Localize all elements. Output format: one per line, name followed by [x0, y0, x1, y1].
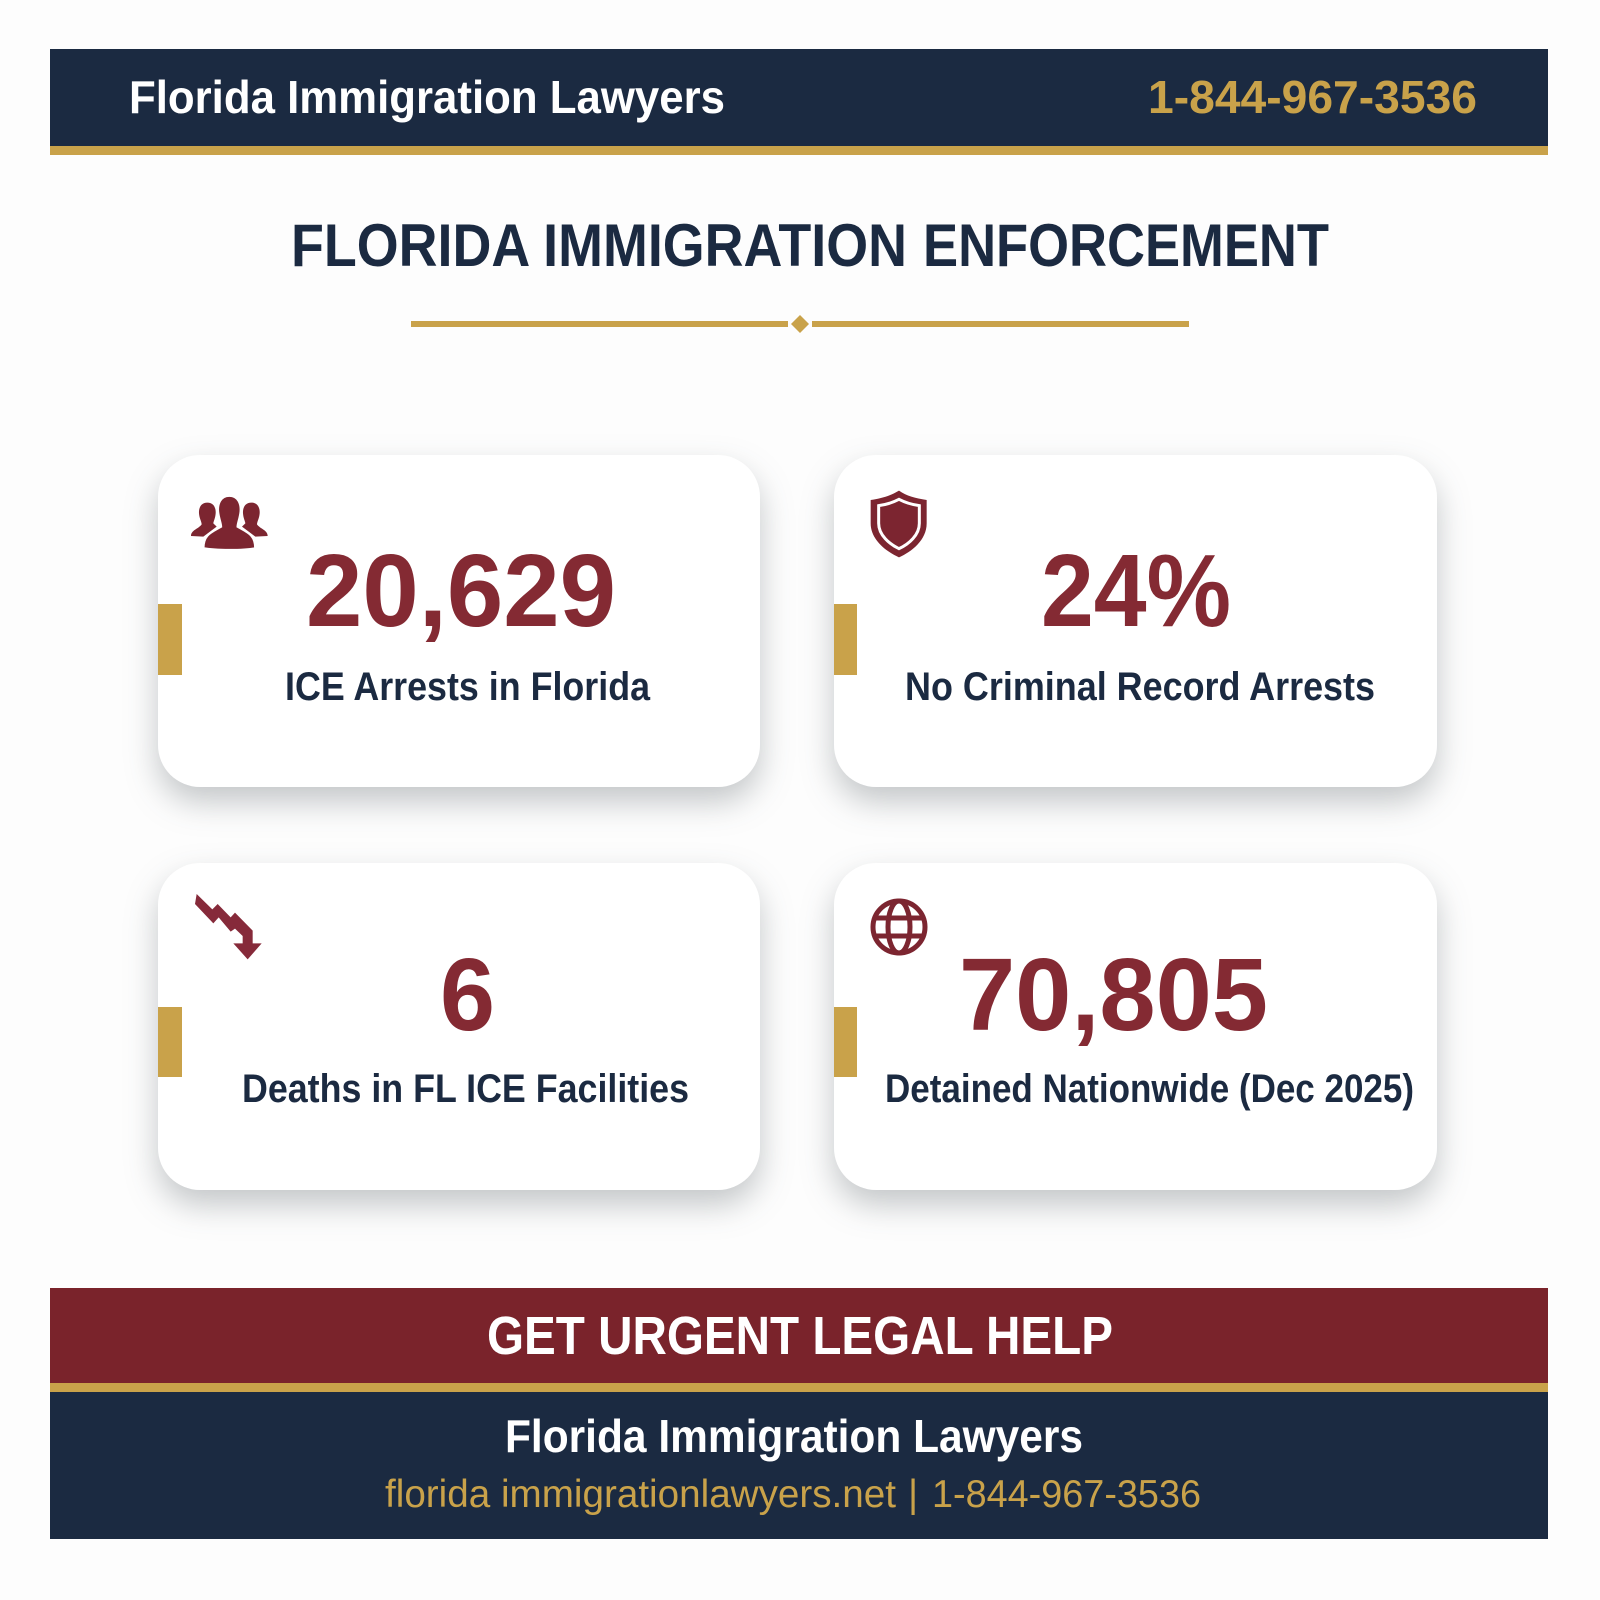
call to action text: GET URGENT LEGAL HELP: [487, 1306, 1113, 1366]
panel: detained nationwide: [834, 863, 1437, 1190]
icon: downward zigzag arrow: [195, 894, 262, 959]
header phone number: 1-844-967-3536: [1148, 71, 1477, 123]
stat: 24%: 24%: [1041, 533, 1231, 648]
title: [291, 212, 1329, 279]
footer contact line: |: [908, 1473, 918, 1516]
footer contact line: florida immigrationlawyers.net: [385, 1473, 896, 1516]
panel: ICE arrests in Florida: [158, 455, 760, 787]
panel: deaths in FL ICE facilities: [158, 863, 760, 1190]
title: ENFORCEMENT: [923, 212, 1329, 279]
footer contact line: [385, 1473, 1201, 1516]
stat: 6: 6: [440, 937, 495, 1052]
footer firm name: Florida Immigration Lawyers: [505, 1410, 1083, 1462]
title: FLORIDA IMMIGRATION: [291, 212, 907, 279]
stat: 70,805: 70,805: [959, 937, 1268, 1052]
icon: group of people: [191, 496, 268, 550]
header firm name: Florida Immigration Lawyers: [129, 71, 725, 123]
footer contact line: 1-844-967-3536: [932, 1473, 1201, 1516]
icon: globe: [873, 901, 925, 953]
label: Deaths in FL ICE Facilities: Deaths in FL ICE Facilities: [242, 1067, 689, 1111]
panel: no criminal record arrests: [834, 455, 1437, 787]
header banner: [50, 49, 1548, 155]
footer panel: [50, 1383, 1548, 1539]
call to action banner: [50, 1288, 1548, 1383]
label: ICE Arrests in Florida: ICE Arrests in Florida: [285, 665, 651, 709]
label: No Criminal Record Arrests: No Criminal Record Arrests: [905, 665, 1375, 709]
title divider with diamond: [411, 315, 1189, 333]
label: Detained Nationwide (Dec 2025): Detained Nationwide (Dec 2025): [885, 1067, 1414, 1111]
stat: 20,629: 20,629: [306, 533, 616, 648]
icon: shield: [871, 491, 927, 557]
